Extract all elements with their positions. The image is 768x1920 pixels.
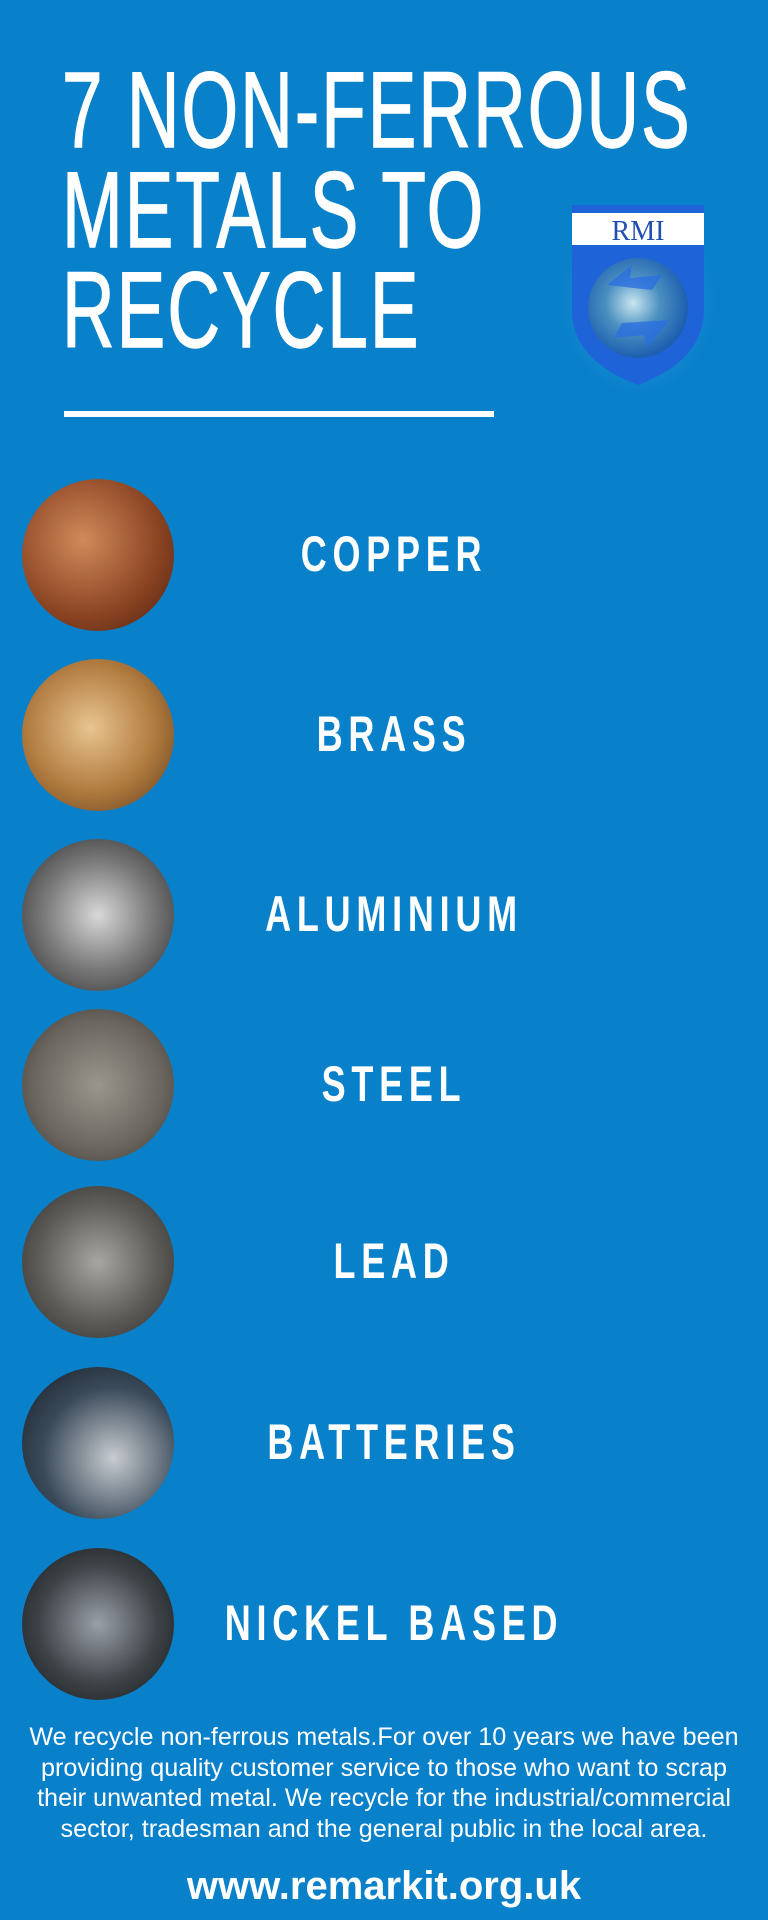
- label: copper: COPPER: [301, 526, 487, 582]
- footer text: sector, tradesman and the general public in the local area.: [61, 1815, 707, 1843]
- item: batteries: [22, 1367, 174, 1519]
- item: aluminium: [22, 839, 174, 991]
- label: steel: STEEL: [322, 1056, 466, 1112]
- title: METALS TO: [62, 149, 485, 270]
- item: brass: [22, 659, 174, 811]
- label: brass: BRASS: [317, 706, 471, 762]
- logo: RMI shield: RMI: [612, 216, 664, 247]
- footer text: providing quality customer service to those who want to scrap: [41, 1754, 727, 1782]
- footer text: We recycle non-ferrous metals.For over 10 years we have been: [29, 1723, 739, 1751]
- item: copper: [22, 479, 174, 631]
- footer text: their unwanted metal. We recycle for the industrial/commercial: [37, 1784, 731, 1812]
- item: lead: [22, 1186, 174, 1338]
- website url: www.remarkit.org.uk: [187, 1864, 581, 1908]
- label: lead: LEAD: [333, 1233, 455, 1289]
- title: 7 NON-FERROUS: [62, 49, 692, 170]
- logo: RMI shield: [572, 205, 704, 385]
- item: steel: [22, 1009, 174, 1161]
- label: batteries: BATTERIES: [267, 1414, 521, 1470]
- title: [62, 49, 692, 370]
- item: nickel based: [22, 1548, 174, 1700]
- footer text: [29, 1723, 739, 1843]
- label: nickel based: NICKEL BASED: [225, 1595, 563, 1651]
- label: aluminium: ALUMINIUM: [265, 886, 523, 942]
- title: RECYCLE: [62, 249, 421, 370]
